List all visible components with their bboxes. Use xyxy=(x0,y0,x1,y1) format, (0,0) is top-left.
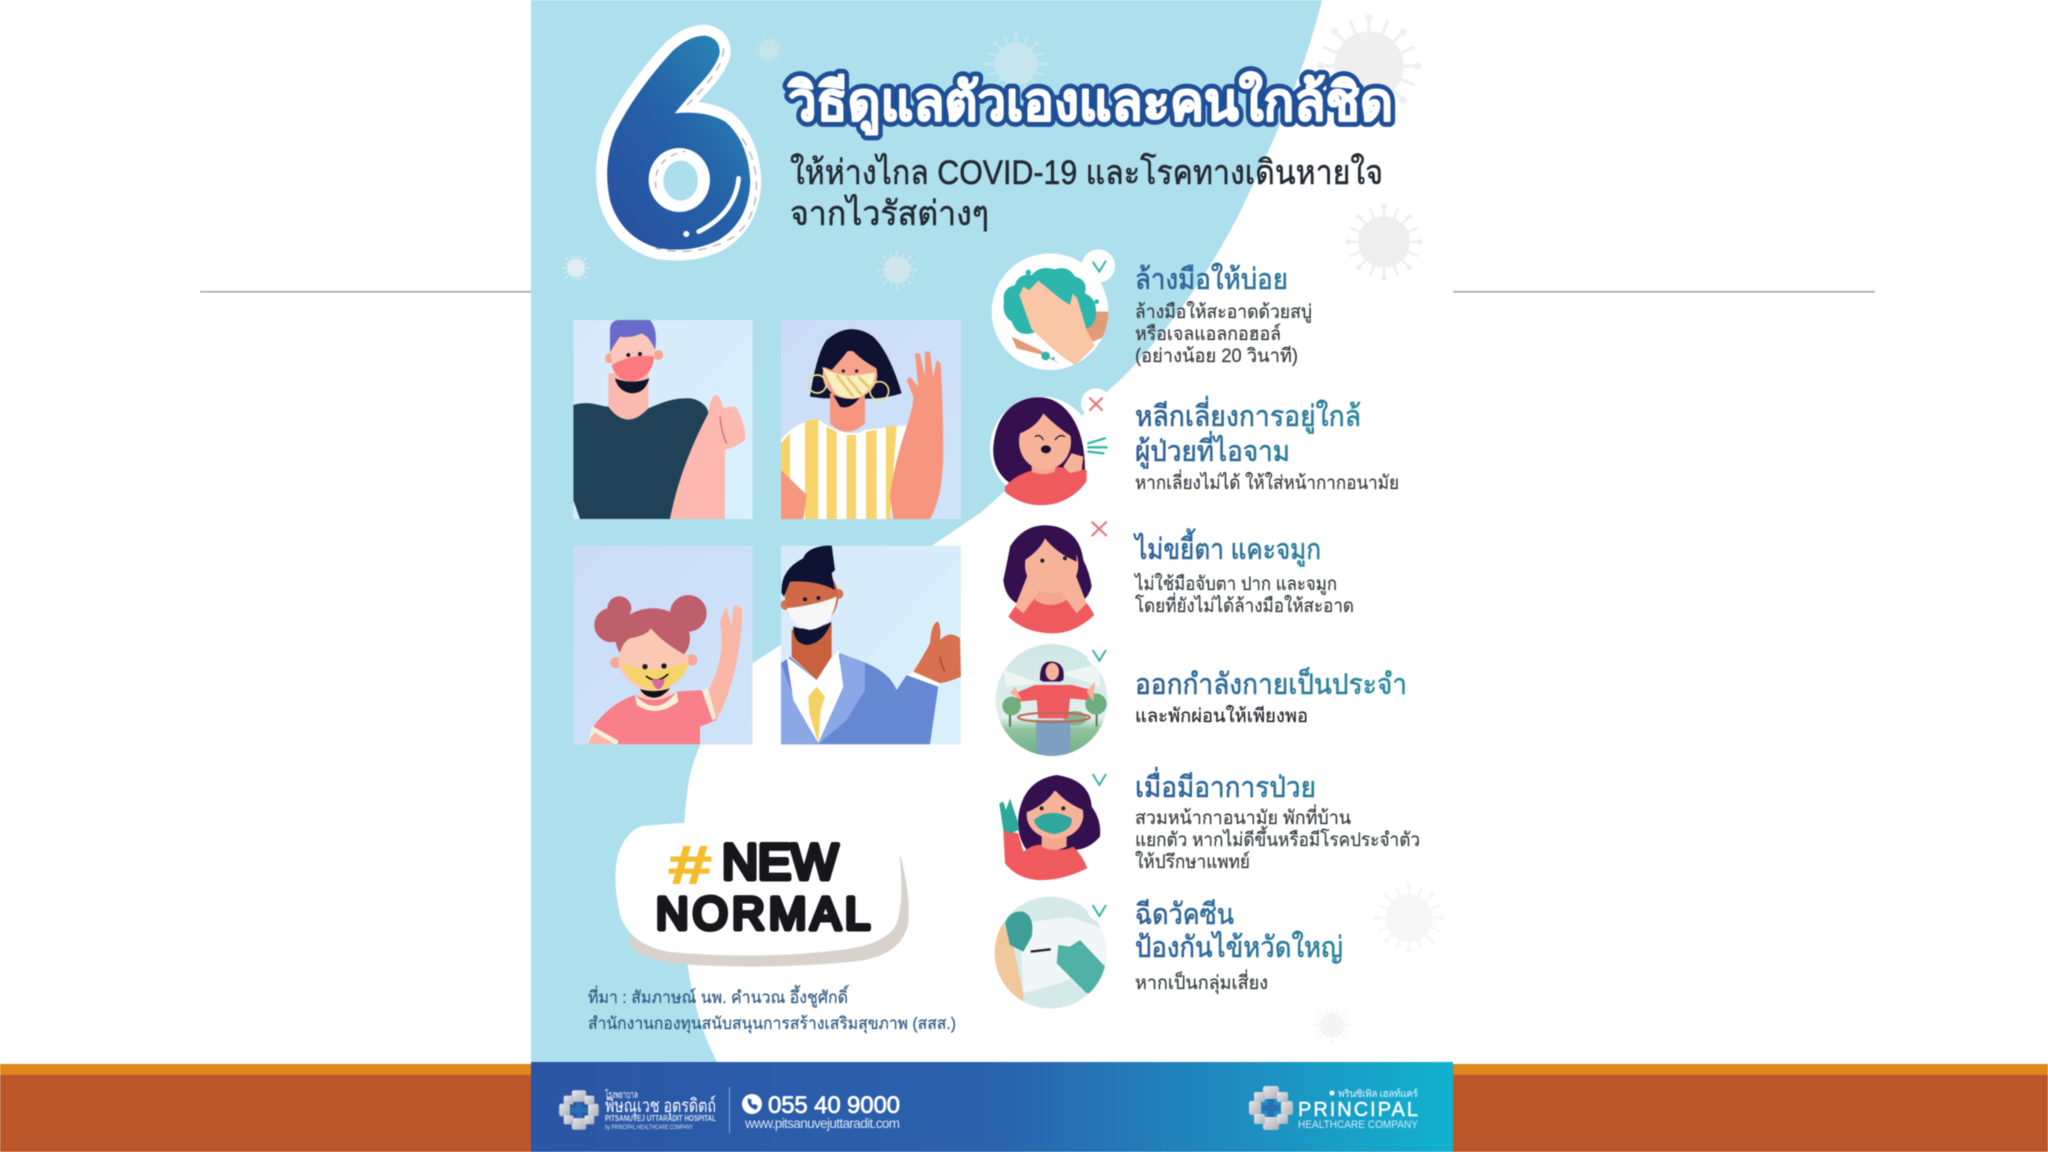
principal logo xyxy=(1249,1086,1293,1130)
new normal speech bubble: NORMAL xyxy=(656,888,870,939)
hospital name xyxy=(605,1088,716,1131)
heading block 2: หากเลี่ยงไม่ได้ ให้ใส่หน้ากากอนามัย xyxy=(1135,469,1399,494)
heading block 2 xyxy=(1135,396,1399,494)
icon: cross mark xyxy=(1089,398,1103,411)
panel: man with pink mask xyxy=(573,320,753,519)
new normal speech bubble xyxy=(615,820,909,967)
icon: cough spray xyxy=(1088,438,1107,453)
heading block 1: หรือเจลแอลกอฮอล์ xyxy=(1135,323,1281,345)
icon: cross mark xyxy=(1092,522,1107,536)
source credit: สำนักงานกองทุนสนับสนุนการสร้างเสริมสุขภาพ (สสส.) xyxy=(588,1014,956,1034)
new normal speech bubble: # xyxy=(670,837,710,895)
icon: vaccination xyxy=(993,897,1111,1010)
hospital name: PITSANUVEJ UTTARADIT HOSPITAL xyxy=(605,1114,716,1123)
heading block 1: ล้างมือให้สะอาดด้วยสบู่ xyxy=(1135,301,1312,323)
subtitle: จากไวรัสต่างๆ xyxy=(790,194,989,233)
title: วิธีดูแลตัวเองและคนใกล้ชิด xyxy=(787,71,1393,135)
heading block 1: (อย่างน้อย 20 วินาที) xyxy=(1135,345,1298,367)
panel: man in blue suit xyxy=(781,545,961,745)
source credit: ที่มา : สัมภาษณ์ นพ. คำนวณ อึ้งชูศักดิ์ xyxy=(588,985,850,1008)
hospital name: พิษณุเวช อุตรดิตถ์ xyxy=(605,1095,716,1118)
icon: hand washing xyxy=(992,249,1115,370)
divider and phone: 055 40 9000 xyxy=(768,1092,900,1119)
principal wordmark: พรินซิเพิล เฮลท์แคร์ xyxy=(1338,1088,1419,1100)
heading block 6: ฉีดวัคซีน xyxy=(1135,899,1234,931)
heading block 3: โดยที่ยังไม่ได้ล้างมือให้สะอาด xyxy=(1135,592,1354,617)
principal wordmark: PRINCIPAL xyxy=(1298,1099,1418,1121)
divider and phone: www.pitsanuvejuttaradit.com xyxy=(744,1116,900,1131)
heading block 5: ให้ปรึกษาแพทย์ xyxy=(1135,851,1250,873)
new normal speech bubble: NEW xyxy=(722,834,839,890)
heading block 5 xyxy=(1135,767,1420,873)
heading block 4: ออกกำลังกายเป็นประจำ xyxy=(1135,666,1407,701)
heading block 3: ไม่ใช้มือจับตา ปาก และจมูก xyxy=(1133,573,1337,595)
subtitle xyxy=(790,153,1383,233)
heading block 2: ผู้ป่วยที่ไอจาม xyxy=(1135,431,1290,469)
hospital name: by PRINCIPAL HEALTHCARE COMPANY xyxy=(605,1125,693,1131)
title: วิธีดูแลตัวเองและคนใกล้ชิด xyxy=(787,71,1393,135)
heading block 3: ไม่ขยี้ตา แคะจมูก xyxy=(1133,528,1321,567)
source credit xyxy=(588,985,956,1034)
heading block 1 xyxy=(1135,262,1312,367)
hospital logo xyxy=(559,1090,599,1130)
heading block 5: แยกตัว หากไม่ดีขึ้นหรือมีโรคประจำตัว xyxy=(1135,826,1420,851)
hospital name: โรงพยาบาล xyxy=(605,1088,638,1101)
icon: woman coughing xyxy=(990,388,1111,507)
big number 6 xyxy=(607,36,756,251)
heading block 6 xyxy=(1135,899,1343,995)
icon: sick woman with mask xyxy=(999,774,1106,880)
principal wordmark xyxy=(1298,1088,1419,1131)
heading block 6: หากเป็นกลุ่มเสี่ยง xyxy=(1135,969,1268,995)
panel: girl with yellow mask xyxy=(573,546,753,745)
heading block 4 xyxy=(1135,666,1407,727)
heading block 2: หลีกเลี่ยงการอยู่ใกล้ xyxy=(1135,396,1361,434)
divider and phone xyxy=(729,1087,900,1133)
heading block 6: ป้องกันไข้หวัดใหญ่ xyxy=(1135,930,1343,964)
principal wordmark: HEALTHCARE COMPANY xyxy=(1298,1119,1419,1131)
subtitle: ให้ห่างไกล COVID-19 และโรคทางเดินหายใจ xyxy=(790,153,1383,192)
icon: exercise in park xyxy=(993,641,1112,757)
heading block 3 xyxy=(1133,528,1354,617)
virus decorations xyxy=(563,14,1444,1043)
heading block 5: สวมหน้ากาอนามัย พักที่บ้าน xyxy=(1135,804,1351,829)
heading block 1: ล้างมือให้บ่อย xyxy=(1135,262,1288,296)
poster background xyxy=(531,0,1453,1062)
icon: check mark xyxy=(1093,261,1106,272)
heading block 5: เมื่อมีอาการป่วย xyxy=(1135,767,1316,804)
icon: woman touching face xyxy=(1003,522,1107,633)
panel: woman with striped mask xyxy=(781,320,961,519)
heading block 4: และพักผ่อนให้เพียงพอ xyxy=(1135,705,1308,727)
footer bar xyxy=(531,1062,1453,1152)
